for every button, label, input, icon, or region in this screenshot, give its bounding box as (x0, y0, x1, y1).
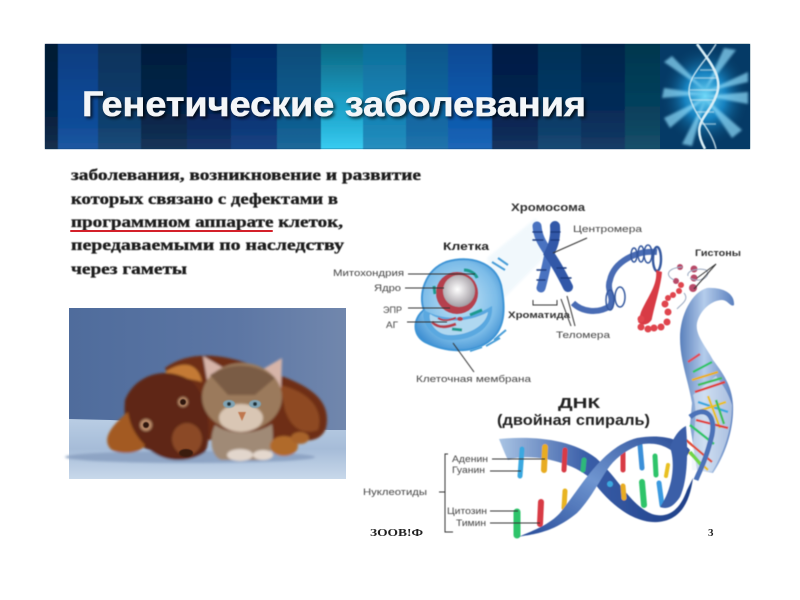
kitten head (202, 363, 282, 431)
diagram labels: Аденин (452, 454, 488, 464)
diagram labels: Митохондрия (333, 268, 404, 278)
heading: chromosome: Хромосома (511, 202, 586, 214)
strand back (499, 438, 693, 522)
icon: cell (416, 258, 508, 351)
diagram labels: АГ (386, 320, 398, 330)
puppy left ear (107, 412, 145, 453)
title: Генетические заболевания (82, 85, 586, 124)
photo: puppy and kitten (65, 308, 346, 479)
DNA double helix (499, 426, 693, 537)
histone beads (638, 264, 708, 332)
diagram labels: Хроматида (508, 310, 571, 320)
puppy paw (270, 436, 298, 456)
diagram labels: Цитозин (447, 506, 487, 516)
diagram labels: Клеточная мембрана (416, 374, 531, 384)
diagram labels: Гуанин (452, 465, 485, 475)
floor shadow (65, 451, 315, 463)
diagram labels: Теломера (556, 330, 610, 340)
slide number: 3 (708, 527, 714, 539)
chromatin coil (573, 245, 661, 311)
puppy ear back (165, 365, 202, 382)
base pairs (517, 445, 668, 535)
icon: chromosome (533, 226, 571, 288)
puppy body (165, 356, 327, 441)
definition text: которых связано с дефектами в (71, 191, 338, 208)
diagram labels: Нуклеотиды (363, 487, 427, 497)
leader lines (405, 238, 716, 532)
footer label: ЗООВ!Ф (370, 528, 424, 539)
heading: DNA double helix: (двойная спираль) (497, 412, 650, 429)
definition text: передаваемыми по наследству (71, 237, 344, 254)
diagram labels (333, 202, 741, 528)
diagram labels: Ядро (374, 283, 401, 293)
heading: DNA double helix: ДНК (558, 395, 601, 412)
definition text (71, 167, 421, 278)
diagram labels: Гистоны (695, 248, 741, 258)
heading: DNA double helix (497, 395, 650, 429)
definition text: заболевания, возникновение и развитие (71, 167, 421, 184)
red underline (70, 230, 273, 232)
kitten chest (211, 424, 273, 460)
diagram labels: Центромера (573, 224, 642, 234)
definition text: программном аппарате клеток, (71, 214, 343, 231)
diagram labels: Клетка (443, 241, 490, 253)
diagram labels: ЭПР (383, 305, 402, 315)
diagram labels: Тимин (456, 518, 486, 528)
puppy head (125, 373, 209, 460)
kitten ears (203, 356, 227, 385)
strand front (518, 436, 690, 537)
title banner (45, 44, 750, 149)
definition text: через гаметы (71, 261, 188, 278)
cell zoom beam (487, 218, 548, 300)
banner DNA glow (660, 44, 750, 149)
diagram: cell to DNA (416, 218, 734, 537)
DNA tube upper (680, 288, 734, 480)
